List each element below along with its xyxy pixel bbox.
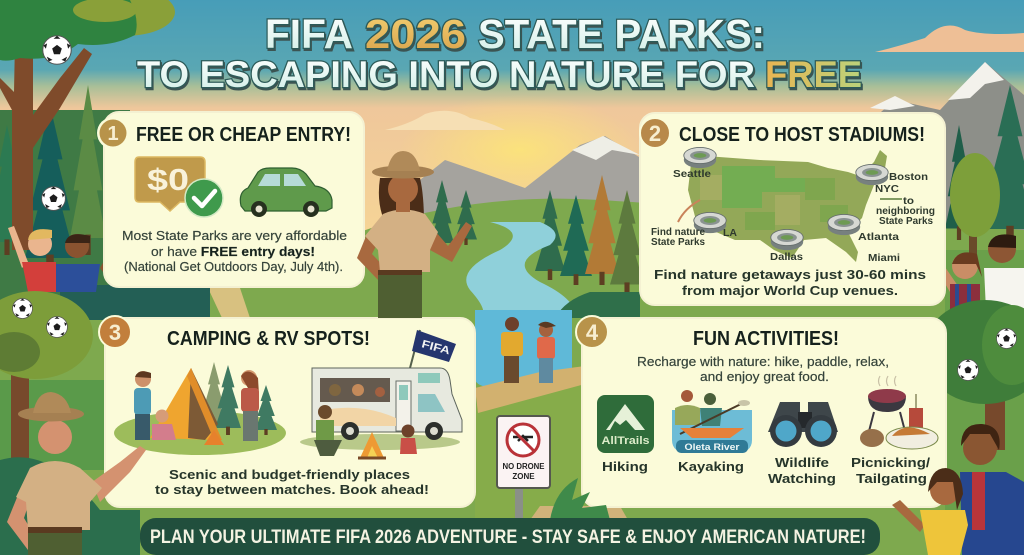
river: [466, 222, 575, 318]
background: sunset glow: [400, 95, 640, 205]
activity labels: Tailgating: [856, 471, 927, 486]
icon: $0 price tag: [135, 157, 205, 211]
map labels: State Parks: [879, 216, 933, 227]
mountain snow: right: [870, 62, 1004, 110]
panel 4: fun activities: [576, 316, 946, 507]
badge 3: [99, 316, 131, 348]
map labels: Atlanta: [858, 232, 900, 243]
icon: kayak on river: Oleta River: [684, 442, 740, 452]
panel 3: camping and RV spots: [99, 316, 475, 507]
ground: lower left mid green: [0, 380, 108, 470]
footer banner: [140, 518, 880, 555]
ground: mid hills: [0, 199, 1024, 555]
map labels: Find nature: [651, 227, 705, 238]
mountain snow: centre: [572, 136, 640, 160]
ranger: woman centre: [357, 151, 472, 318]
soccer balls: lower right tree: [958, 329, 1016, 380]
intro text 4: and enjoy great food.: [700, 369, 829, 384]
river lower: [475, 310, 572, 388]
ground: dark teal band left: [60, 285, 210, 320]
illustration: tent campsite: [114, 362, 286, 455]
badge 2: [640, 118, 670, 148]
ground: dark bushes by river: [555, 292, 640, 318]
panel 1: free or cheap entry: [97, 112, 364, 287]
stadiums: [684, 147, 888, 250]
icon: green car: [240, 168, 332, 217]
map labels: Miami: [868, 253, 900, 264]
cloud: top right: [875, 26, 1024, 52]
badge 3: 3: [109, 320, 121, 345]
background: sky: [0, 0, 1024, 240]
sign: no drone zone: [497, 416, 550, 519]
icon: kayak on river: [672, 390, 752, 453]
map labels: Boston: [889, 172, 928, 183]
forest: left: [0, 85, 130, 315]
ground: right: [945, 250, 1024, 555]
map labels: LA: [723, 228, 737, 239]
map labels: Dallas: [770, 252, 803, 263]
icon: check mark: [185, 179, 223, 217]
body text 2: [654, 267, 926, 298]
body text 1: (National Get Outdoors Day, July 4th).: [124, 259, 343, 274]
title: [137, 11, 862, 95]
intro text 4: Recharge with nature: hike, paddle, relax,: [637, 354, 889, 369]
body text 3: Scenic and budget-friendly places: [169, 467, 410, 482]
map labels: State Parks: [651, 237, 705, 248]
path: lower segment: [530, 506, 628, 520]
badge 2: 2: [649, 121, 661, 146]
badge 1: 1: [107, 123, 119, 145]
title: TO ESCAPING INTO NATURE FOR: [137, 54, 755, 95]
banner text: PLAN YOUR ULTIMATE FIFA 2026 ADVENTURE - STAY SAFE & ENJOY AMERICAN NATURE!: [150, 527, 866, 548]
map arrow: east: [880, 198, 902, 200]
map labels: Seattle: [673, 169, 712, 180]
map labels: neighboring: [876, 206, 935, 217]
illustration: RV with flag: [300, 330, 462, 458]
flag: FIFA: [412, 330, 456, 362]
intro text 4: [637, 354, 889, 384]
kids: right group: [928, 234, 1024, 320]
map labels: to: [903, 196, 914, 207]
tree: lower right: [923, 300, 1024, 450]
body text 3: [155, 467, 429, 497]
map labels: NYC: [875, 184, 899, 195]
icon: $0 price tag: $0: [147, 162, 189, 197]
map: USA: [688, 150, 887, 262]
body text 1: or have FREE entry days!: [151, 244, 315, 259]
hikers: couple on path: [501, 317, 556, 383]
badge 1: [97, 117, 129, 149]
badge 4: [576, 316, 608, 348]
body text 1: Most State Parks are very affordable: [122, 228, 347, 243]
heading 2: CLOSE TO HOST STADIUMS!: [679, 124, 925, 146]
path: upper left segment: [208, 288, 250, 318]
sign: no drone zone: NO DRONE: [502, 462, 545, 471]
mountains: right: [860, 62, 1024, 250]
tree: lower left: [0, 291, 93, 465]
heading 3: CAMPING & RV SPOTS!: [167, 328, 370, 350]
title: FREE: [765, 54, 862, 95]
kids: left group: [8, 226, 116, 292]
map labels: [651, 169, 935, 264]
heading 4: FUN ACTIVITIES!: [693, 328, 839, 350]
forest: centre right: [430, 175, 644, 295]
tree: top left: [0, 0, 175, 250]
activity labels: [602, 455, 930, 486]
ground: grass lower centre: [475, 378, 585, 520]
title: 2026: [365, 11, 466, 57]
activity labels: Wildlife: [775, 455, 829, 470]
icon: binoculars: [768, 402, 838, 447]
title: STATE PARKS:: [478, 11, 765, 57]
icon: AllTrails hiking: [597, 395, 654, 453]
activity labels: Hiking: [602, 459, 648, 474]
flag: FIFA: FIFA: [420, 338, 451, 357]
title: FIFA: [265, 11, 353, 57]
soccer ball: tree top: [43, 36, 71, 64]
panel 2: close to host stadiums: [640, 113, 945, 305]
heading 1: FREE OR CHEAP ENTRY!: [136, 124, 351, 146]
cloud: centre: [385, 111, 505, 130]
icon: AllTrails hiking: AllTrails: [602, 435, 650, 447]
activity labels: Picnicking/: [851, 455, 930, 470]
body text 2: from major World Cup venues.: [682, 283, 898, 298]
plant: by sign: [550, 478, 610, 520]
activity labels: Watching: [768, 471, 836, 486]
body text 1: [122, 228, 347, 274]
body text 2: Find nature getaways just 30-60 mins: [654, 267, 926, 282]
ground: lower left dark: [0, 457, 140, 555]
tree: right mid: [945, 85, 1024, 260]
body text 3: to stay between matches. Book ahead!: [155, 482, 429, 497]
activity labels: Kayaking: [678, 459, 744, 474]
soccer balls: lower left tree: [13, 299, 67, 337]
map arrow: west: [678, 200, 700, 222]
sign: no drone zone: ZONE: [512, 472, 535, 481]
path: [475, 366, 585, 413]
kids: lower right group: [892, 424, 1024, 555]
badge 4: 4: [586, 320, 599, 345]
icon: grill and food: [860, 376, 938, 449]
mountains: centre: [395, 136, 680, 240]
soccer ball: left forest: [42, 187, 65, 210]
ranger: man lower left: [7, 392, 146, 555]
